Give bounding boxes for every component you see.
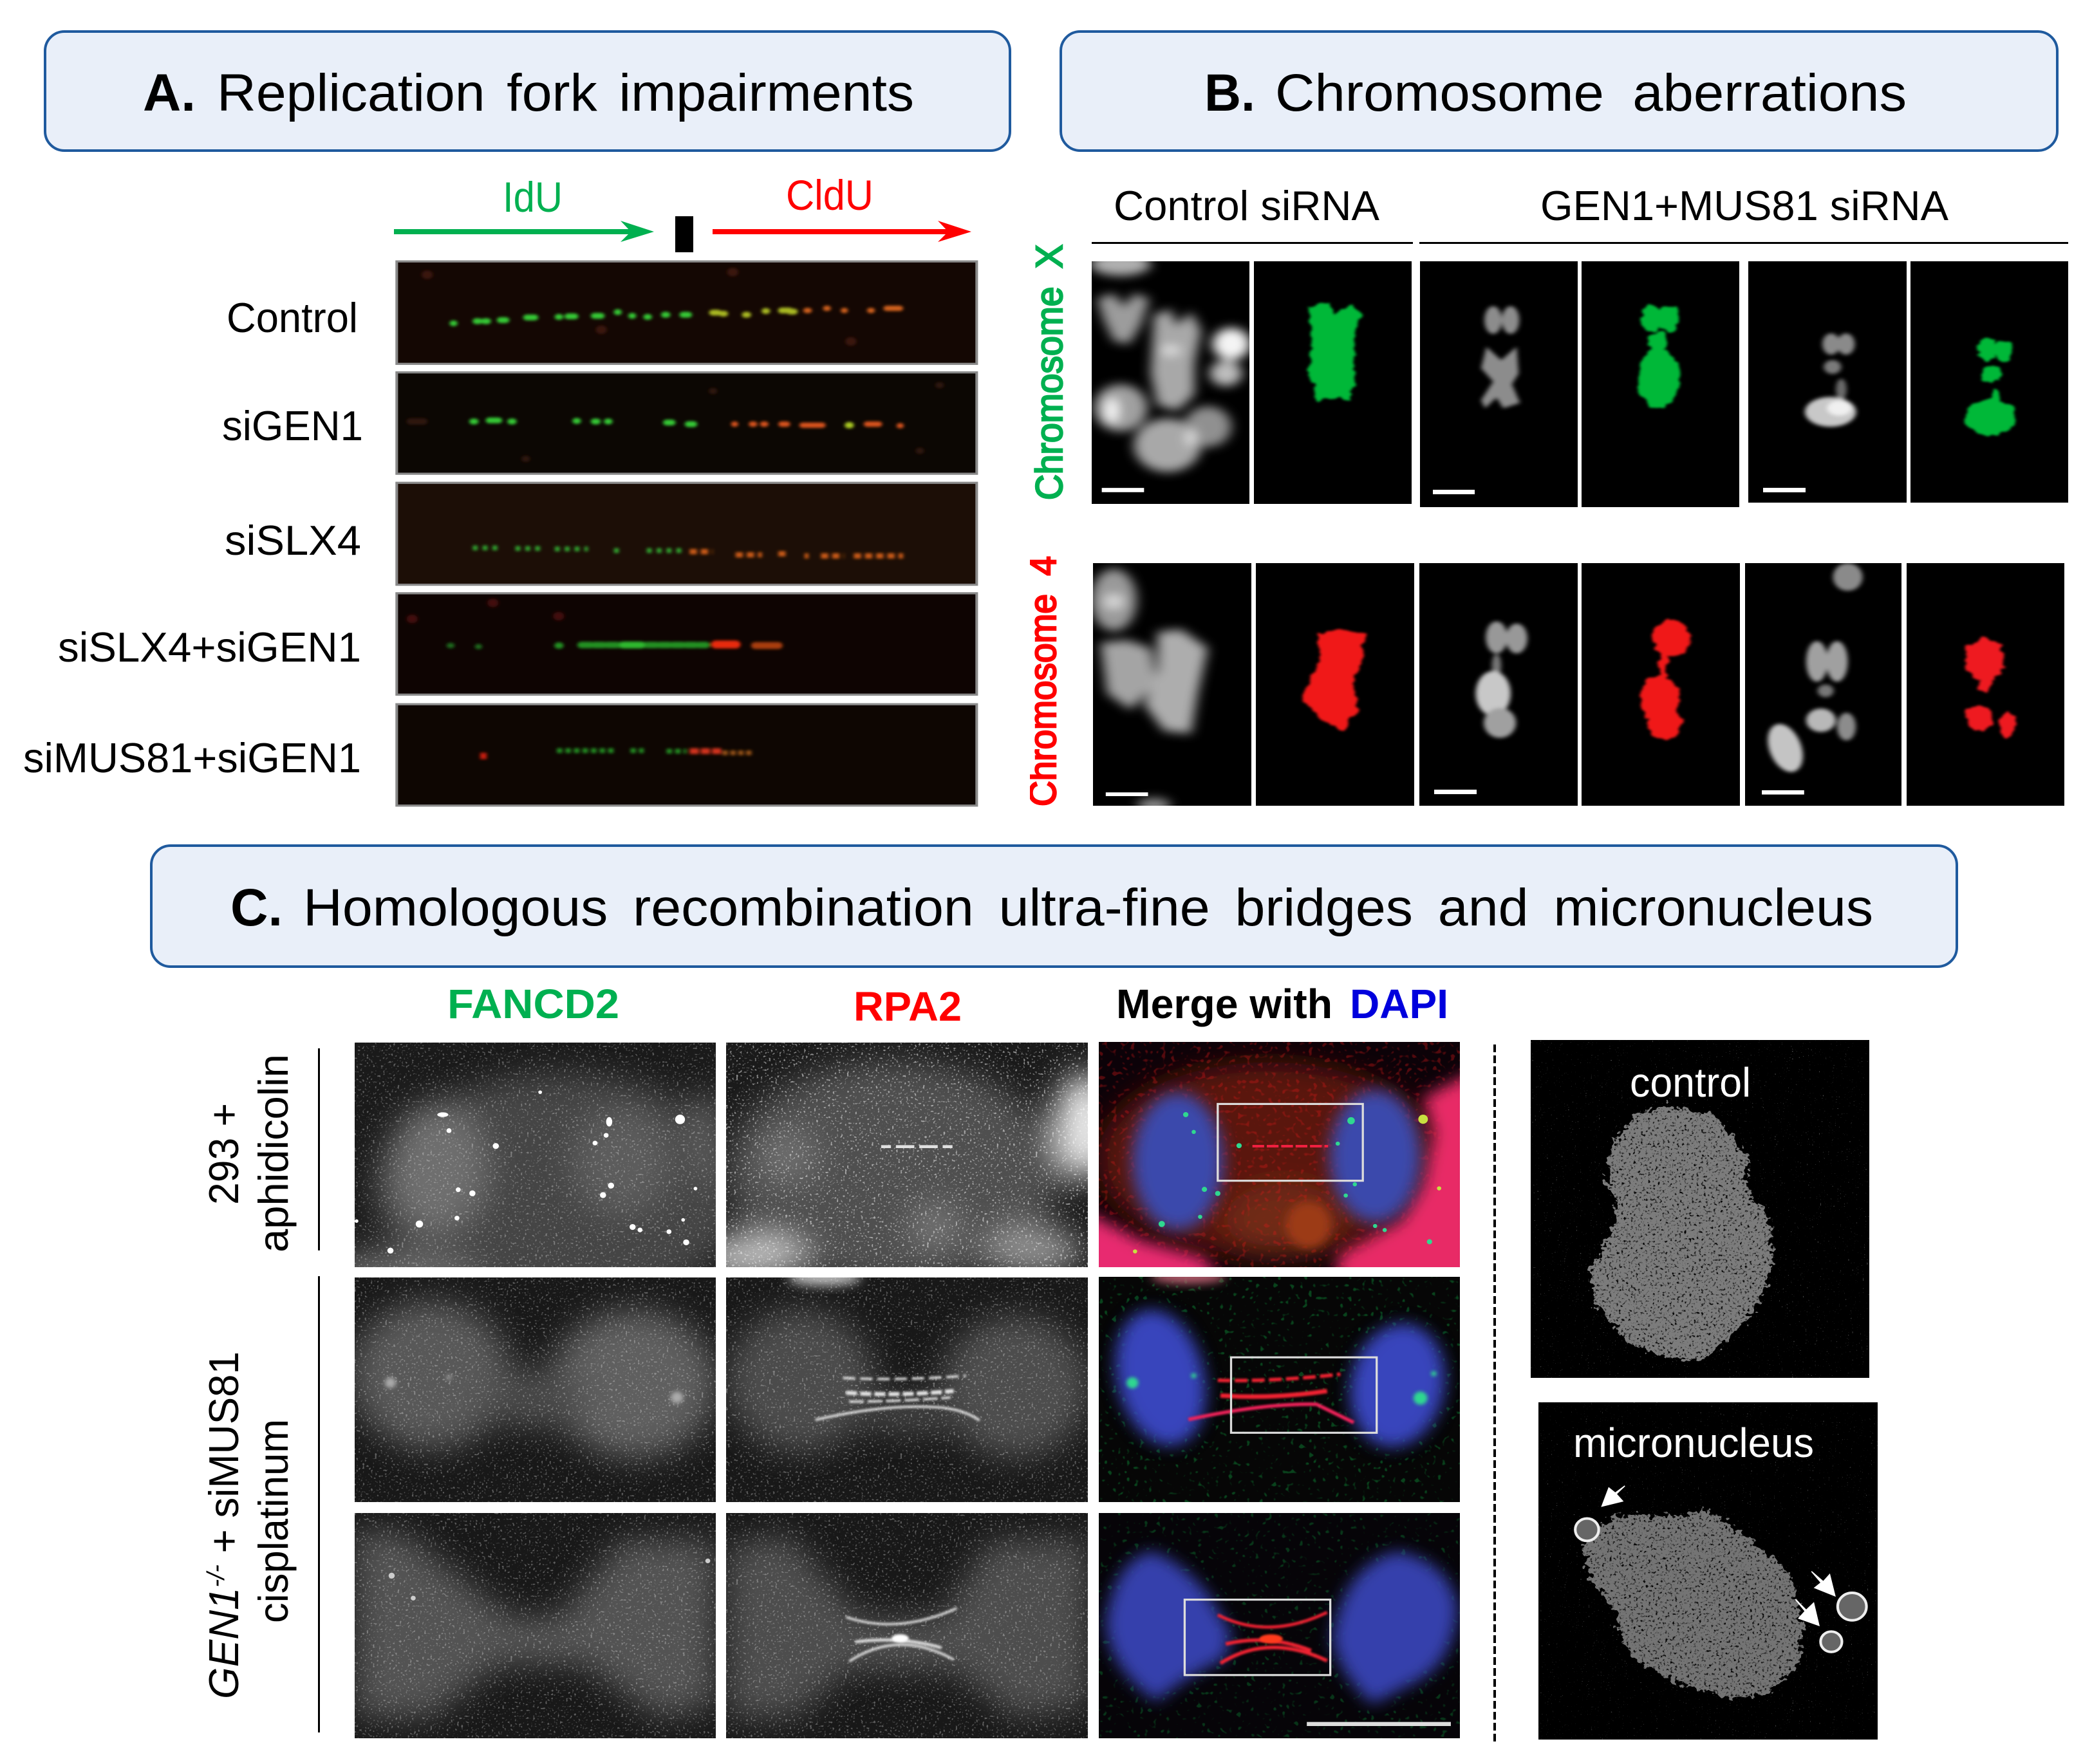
column heading: Merge with DAPI: DAPI: [1350, 981, 1448, 1027]
heading A: [45, 32, 1010, 151]
heading B: B.: [1204, 64, 1255, 122]
image: FANCD2 row 1: [355, 1043, 716, 1267]
dashed divider: [1493, 1044, 1496, 1745]
row label: siGEN1: siGEN1: [222, 402, 363, 449]
fibre strip: Control: [397, 261, 976, 364]
row label: 293 + aphidicolin: [200, 1054, 297, 1252]
row label: siSLX4: siSLX4: [225, 517, 361, 564]
treatment break marker: [675, 216, 693, 252]
image: control nucleus: [1531, 1040, 1869, 1378]
heading A: Replication fork impairments: [217, 64, 914, 122]
column heading: Merge with DAPI: Merge with: [1116, 981, 1332, 1027]
arrow: red CldU: [713, 221, 971, 242]
row label: GEN1-/- + siMUS81 cisplatinum: GEN1: [200, 1587, 247, 1699]
micronuclei circles: [1575, 1518, 1867, 1652]
image: control chromosome 4 paint: [1256, 563, 1414, 806]
heading A: A.: [143, 64, 196, 122]
label: CldU: CldU: [786, 171, 873, 219]
row label: 293 + aphidicolin: 293 +: [200, 1103, 247, 1205]
row label: GEN1-/- + siMUS81 cisplatinum: + siMUS81: [200, 1351, 247, 1564]
image: GEN1+MUS81 chromosome 4 paint 2: [1907, 563, 2064, 806]
arrow: green IdU: [394, 221, 654, 242]
heading B: [1061, 32, 2057, 151]
panel C: homologous recombination, ultra-fine bridges and micronucleus: [150, 844, 1958, 1741]
column heading: Control siRNA: Control siRNA: [1114, 182, 1380, 229]
scale bar overlays: [1433, 488, 1806, 794]
row label: siSLX4+siGEN1: siSLX4+siGEN1: [58, 624, 361, 671]
image: RPA2 row 2: [726, 1277, 1088, 1502]
heading B: Chromosome aberrations: [1275, 64, 1907, 122]
image: merge row 2: [1099, 1277, 1460, 1502]
panel B: chromosome aberrations: [1030, 30, 2068, 806]
row label: GEN1-/- + siMUS81 cisplatinum: -/-: [203, 1564, 230, 1587]
bracket line: rows 2 and 3: [318, 1276, 320, 1732]
fibre strip: siGEN1: [397, 373, 976, 474]
image: GEN1+MUS81 chromosome X paint 2: [1910, 261, 2068, 503]
heading C: Homologous recombination ultra-fine bridges and micronucleus: [303, 878, 1873, 937]
image: control chromosome X paint: [1254, 261, 1412, 504]
panel A: replication fork impairments: [23, 30, 1011, 807]
row label: Control: Control: [227, 294, 358, 341]
fibre strip: siMUS81+siGEN1: [397, 704, 976, 806]
column heading: RPA2: RPA2: [854, 983, 962, 1030]
bracket line: row 1: [318, 1048, 320, 1250]
image: GEN1+MUS81 chromosome X DAPI 2: [1748, 261, 1907, 503]
heading rule: GEN1+MUS81: [1419, 242, 2068, 244]
column heading: GEN1+MUS81 siRNA: GEN1+MUS81 siRNA: [1540, 182, 1949, 229]
heading rule: control: [1092, 242, 1413, 244]
label: micronucleus: micronucleus: [1573, 1420, 1814, 1466]
image: control chromosome X DAPI: [1092, 261, 1249, 504]
image: GEN1+MUS81 chromosome X DAPI 1: [1420, 261, 1578, 507]
image: FANCD2 row 3: [355, 1513, 716, 1738]
image: FANCD2 row 2: [355, 1277, 716, 1502]
column heading: FANCD2: FANCD2: [447, 981, 619, 1027]
image: micronucleus: [1538, 1402, 1878, 1740]
image: control chromosome 4 DAPI: [1093, 563, 1251, 806]
image: GEN1+MUS81 chromosome 4 DAPI 2: [1745, 563, 1901, 806]
heading C: C.: [230, 878, 283, 937]
image: GEN1+MUS81 chromosome 4 DAPI 1: [1419, 563, 1578, 806]
fibre strip: siSLX4: [397, 483, 976, 585]
row label: GEN1-/- + siMUS81 cisplatinum: cisplatinum: [250, 1419, 297, 1623]
fibre strip: siSLX4+siGEN1: [397, 593, 976, 694]
row label: 293 + aphidicolin: aphidicolin: [250, 1054, 297, 1252]
column heading: Merge with DAPI: [1116, 981, 1448, 1027]
arrows to micronuclei: [1602, 1486, 1835, 1626]
image: merge row 1: [1099, 1042, 1460, 1267]
image: RPA2 row 3: [726, 1513, 1088, 1738]
image: RPA2 row 1: [726, 1043, 1088, 1267]
row label: siMUS81+siGEN1: siMUS81+siGEN1: [23, 734, 361, 781]
image: GEN1+MUS81 chromosome 4 paint 1: [1582, 563, 1740, 806]
image: GEN1+MUS81 chromosome X paint 1: [1582, 261, 1739, 507]
label: IdU: IdU: [503, 173, 563, 221]
heading C: [151, 846, 1957, 967]
DNA fibre strips: [397, 261, 976, 806]
label: control: control: [1630, 1059, 1751, 1106]
image: merge row 3: [1099, 1513, 1460, 1738]
row label: GEN1-/- + siMUS81 cisplatinum: [200, 1351, 297, 1699]
